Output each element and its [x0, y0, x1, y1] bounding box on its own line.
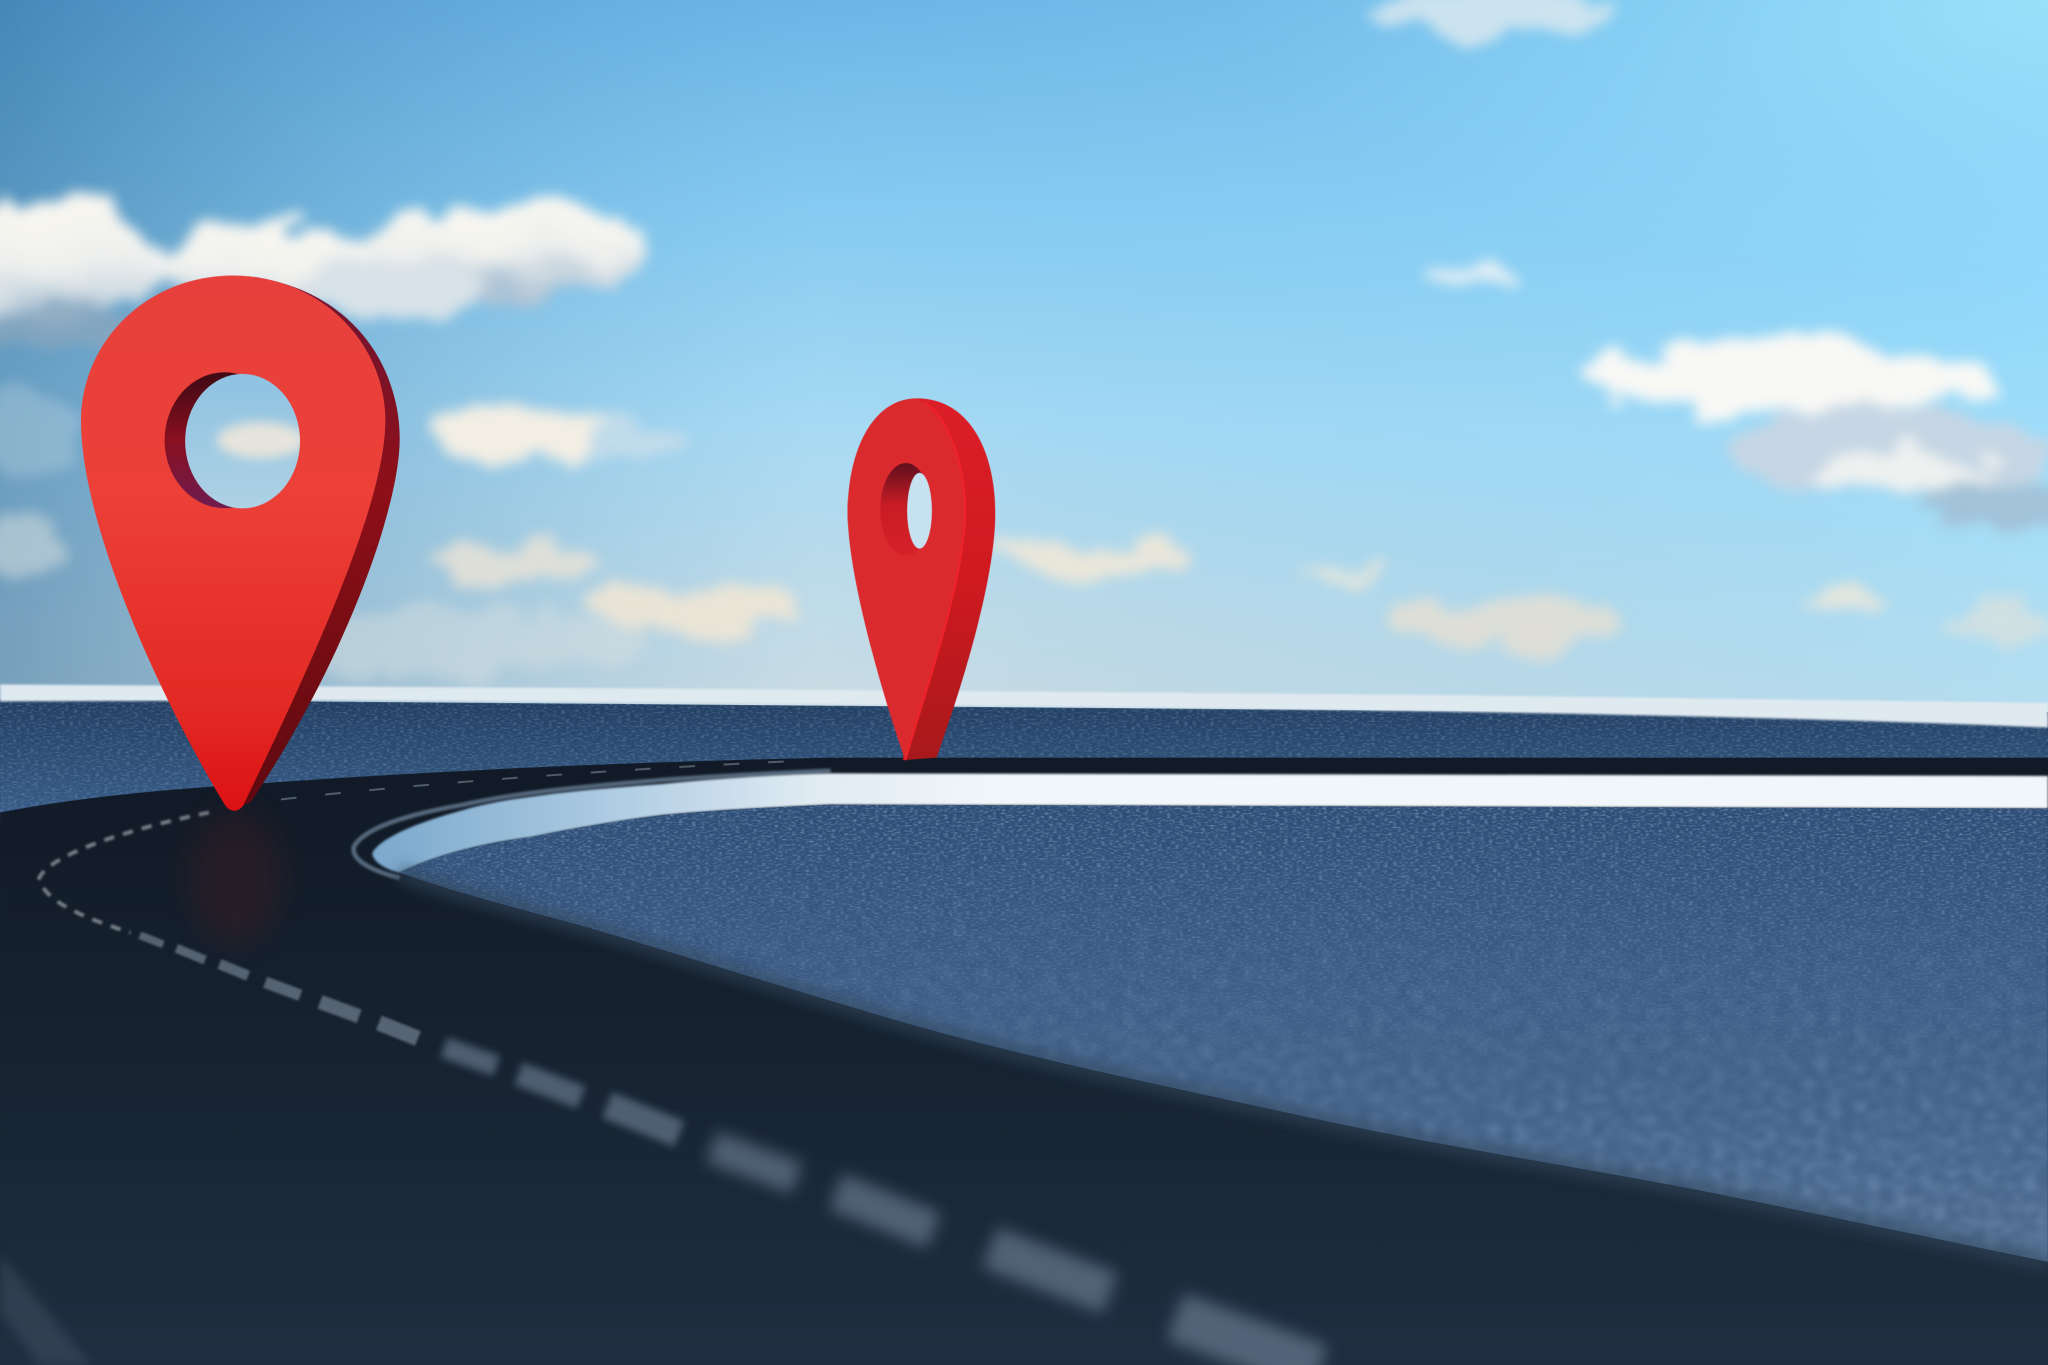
curb rim [354, 771, 831, 878]
white curb band [354, 771, 2048, 878]
pin reflection on road [188, 810, 282, 946]
cloud seen through hole [217, 422, 306, 458]
pin front face [848, 398, 965, 760]
blurred island edge [400, 873, 2048, 1262]
pin hole showing the sky [185, 374, 300, 509]
sky [0, 0, 2048, 712]
horizon white stripe [0, 684, 2048, 728]
icon: distant red map pin [848, 398, 995, 760]
road surface [0, 758, 2048, 1365]
asphalt island [400, 804, 2048, 1262]
pin side wall [903, 398, 995, 760]
icon: large red map pin [81, 276, 400, 811]
road centre dashes [39, 762, 1319, 1365]
pin hole showing the sky [907, 473, 932, 549]
pin hole inner wall [165, 372, 285, 508]
clouds: centre and right [991, 0, 2048, 650]
reflective band [372, 773, 2048, 873]
road edge streak [0, 1254, 91, 1365]
pin side wall [235, 277, 400, 810]
pin front face [81, 276, 385, 811]
clouds: upper left [0, 196, 644, 347]
pin face highlight edge [905, 402, 965, 760]
pin hole inner wall [880, 463, 931, 556]
clouds [0, 0, 2048, 671]
clouds: middle left [0, 392, 794, 671]
far asphalt field [0, 699, 2048, 823]
